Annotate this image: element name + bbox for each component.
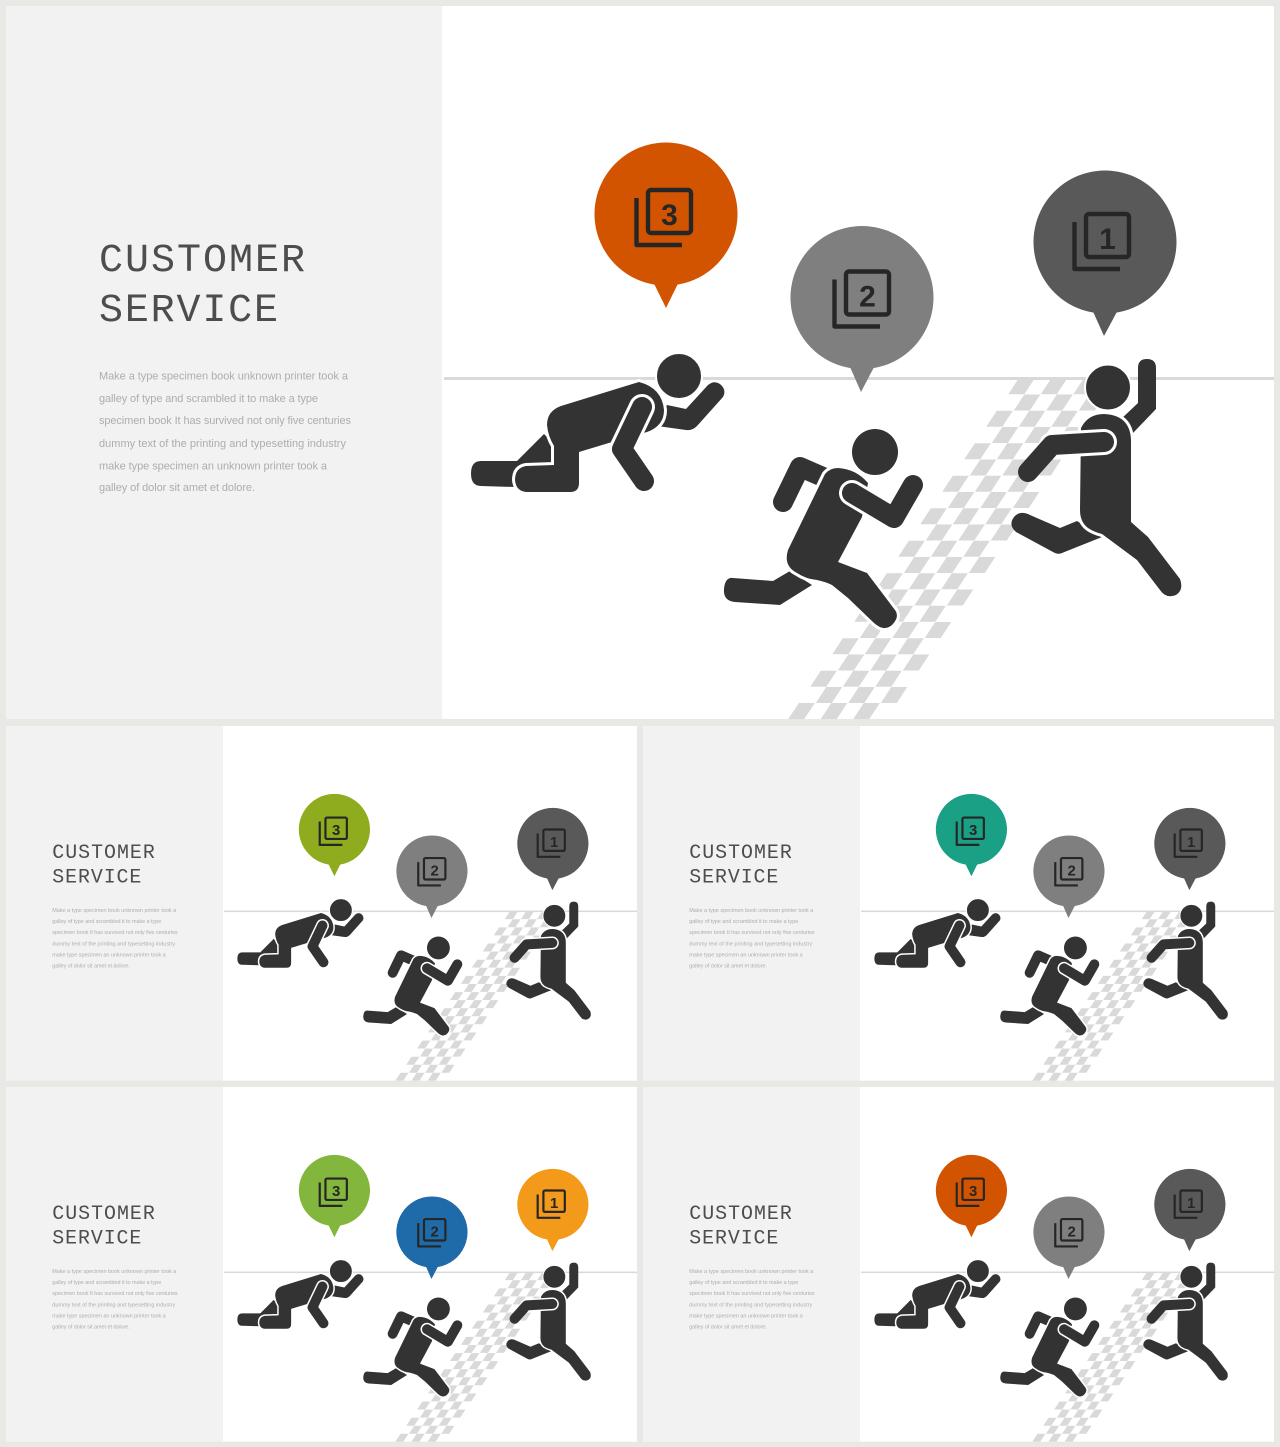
marker: second place bbox=[396, 1196, 468, 1279]
marker: second place: 2 bbox=[1068, 1224, 1076, 1240]
body text: galley of dolor sit amet et dolore. bbox=[52, 1324, 130, 1330]
panel: race scene bbox=[223, 1087, 637, 1442]
panel: text sidebar bbox=[643, 1087, 860, 1442]
finish line bbox=[444, 377, 1274, 380]
body text: galley of type and scrambled it to make a type bbox=[689, 1280, 798, 1286]
body text: make type specimen an unknown printer took a bbox=[99, 460, 328, 472]
body text: dummy text of the printing and typesetting industry bbox=[99, 438, 346, 450]
marker: third place: 3 bbox=[332, 822, 340, 839]
title: SERVICE bbox=[52, 866, 141, 889]
marker: third place bbox=[936, 1155, 1007, 1237]
marker: second place: 2 bbox=[431, 863, 439, 879]
body text bbox=[52, 908, 178, 969]
body text: dummy text of the printing and typesetting industry bbox=[689, 1302, 812, 1308]
title: CUSTOMER bbox=[52, 1202, 155, 1225]
icon: person crossing line bbox=[1143, 1263, 1228, 1381]
panel: text sidebar bbox=[6, 1087, 223, 1442]
marker: second place: 2 bbox=[859, 280, 876, 314]
body text: specimen book It has survived not only five centuries bbox=[52, 1291, 178, 1297]
marker: first place: 1 bbox=[1187, 1195, 1195, 1212]
marker: second place bbox=[1033, 1196, 1105, 1279]
body text: specimen book It has survived not only five centuries bbox=[52, 930, 178, 936]
body text: galley of type and scrambled it to make a type bbox=[99, 393, 318, 405]
title: CUSTOMER bbox=[689, 1202, 792, 1225]
marker: second place bbox=[1033, 835, 1105, 918]
body text bbox=[689, 1269, 815, 1330]
marker: second place bbox=[790, 226, 934, 392]
title: SERVICE bbox=[52, 1227, 141, 1250]
panel: race scene bbox=[860, 1087, 1274, 1442]
marker: third place: 3 bbox=[332, 1183, 340, 1200]
body text: make type specimen an unknown printer took a bbox=[52, 1314, 167, 1320]
icon: crawling person bbox=[237, 1260, 364, 1329]
body text: galley of type and scrambled it to make a type bbox=[52, 1280, 161, 1286]
marker: second place: 2 bbox=[1068, 863, 1076, 879]
marker: first place bbox=[1154, 808, 1225, 890]
icon: running person bbox=[1000, 936, 1094, 1035]
body text: dummy text of the printing and typesetting industry bbox=[689, 941, 812, 947]
marker: third place bbox=[936, 794, 1007, 876]
icon: crawling person bbox=[471, 353, 724, 492]
marker: first place bbox=[1154, 1169, 1225, 1251]
slide: multicolour variant bbox=[6, 1087, 637, 1442]
marker: first place: 1 bbox=[1187, 834, 1195, 851]
icon: running person bbox=[1000, 1297, 1094, 1396]
finish line bbox=[861, 1272, 1274, 1273]
icon: running person bbox=[724, 429, 913, 628]
body text: galley of type and scrambled it to make a type bbox=[689, 919, 798, 925]
title bbox=[689, 1202, 792, 1250]
body text: make type specimen an unknown printer took a bbox=[52, 953, 167, 959]
body text bbox=[99, 370, 352, 494]
panel: text sidebar bbox=[6, 726, 223, 1081]
checkered track bbox=[1032, 911, 1190, 1081]
title: CUSTOMER bbox=[689, 841, 792, 864]
body text: dummy text of the printing and typesetting industry bbox=[52, 941, 175, 947]
title bbox=[52, 841, 155, 889]
body text: make type specimen an unknown printer took a bbox=[689, 953, 804, 959]
panel: race scene bbox=[860, 726, 1274, 1081]
body text: galley of dolor sit amet et dolore. bbox=[689, 1324, 767, 1330]
slide: main bbox=[6, 6, 1274, 719]
body text: specimen book It has survived not only five centuries bbox=[689, 930, 815, 936]
marker: third place bbox=[594, 143, 738, 308]
marker: first place: 1 bbox=[550, 834, 558, 851]
marker: first place bbox=[1034, 171, 1176, 336]
icon: running person bbox=[363, 1297, 457, 1396]
title: SERVICE bbox=[689, 866, 778, 889]
marker: first place bbox=[517, 1169, 588, 1251]
body text bbox=[52, 1269, 178, 1330]
icon: person crossing line bbox=[1011, 359, 1181, 596]
checkered track bbox=[395, 1272, 553, 1442]
body text: specimen book It has survived not only five centuries bbox=[99, 415, 352, 427]
title bbox=[99, 239, 305, 334]
title bbox=[689, 841, 792, 889]
marker: third place bbox=[299, 1155, 370, 1237]
title: CUSTOMER bbox=[52, 841, 155, 864]
body text: galley of dolor sit amet et dolore. bbox=[689, 963, 767, 969]
body text: Make a type specimen book unknown printer took a bbox=[52, 1269, 177, 1275]
marker: first place: 1 bbox=[550, 1195, 558, 1212]
marker: third place: 3 bbox=[969, 822, 977, 839]
title: SERVICE bbox=[689, 1227, 778, 1250]
marker: second place: 2 bbox=[431, 1224, 439, 1240]
icon: person crossing line bbox=[1143, 902, 1228, 1020]
checkered track bbox=[1032, 1272, 1190, 1442]
body text: galley of dolor sit amet et dolore. bbox=[99, 482, 255, 494]
icon: person crossing line bbox=[506, 902, 591, 1020]
marker: third place: 3 bbox=[969, 1183, 977, 1200]
finish line bbox=[861, 911, 1274, 912]
body text: Make a type specimen book unknown printer took a bbox=[99, 370, 349, 382]
marker: second place bbox=[396, 835, 468, 918]
body text: galley of type and scrambled it to make a type bbox=[52, 919, 161, 925]
body text: Make a type specimen book unknown printer took a bbox=[689, 1269, 814, 1275]
marker: third place: 3 bbox=[661, 199, 678, 232]
marker: first place: 1 bbox=[1099, 223, 1116, 256]
marker: first place bbox=[517, 808, 588, 890]
body text: Make a type specimen book unknown printer took a bbox=[52, 908, 177, 914]
panel: race scene bbox=[223, 726, 637, 1081]
icon: crawling person bbox=[237, 899, 364, 968]
panel: text sidebar bbox=[6, 6, 442, 719]
icon: running person bbox=[363, 936, 457, 1035]
slide: green variant bbox=[6, 726, 637, 1081]
panel: text sidebar bbox=[643, 726, 860, 1081]
icon: person crossing line bbox=[506, 1263, 591, 1381]
title: SERVICE bbox=[99, 289, 278, 334]
slide: teal variant bbox=[643, 726, 1274, 1081]
body text: Make a type specimen book unknown printer took a bbox=[689, 908, 814, 914]
body text: specimen book It has survived not only five centuries bbox=[689, 1291, 815, 1297]
finish line bbox=[224, 1272, 637, 1273]
checkered track bbox=[395, 911, 553, 1081]
panel: race scene bbox=[442, 6, 1274, 719]
checkered track bbox=[788, 378, 1105, 719]
marker: third place bbox=[299, 794, 370, 876]
slide: orange variant bbox=[643, 1087, 1274, 1442]
body text bbox=[689, 908, 815, 969]
body text: dummy text of the printing and typesetting industry bbox=[52, 1302, 175, 1308]
title bbox=[52, 1202, 155, 1250]
body text: make type specimen an unknown printer took a bbox=[689, 1314, 804, 1320]
icon: crawling person bbox=[874, 899, 1001, 968]
icon: crawling person bbox=[874, 1260, 1001, 1329]
body text: galley of dolor sit amet et dolore. bbox=[52, 963, 130, 969]
finish line bbox=[224, 911, 637, 912]
title: CUSTOMER bbox=[99, 239, 305, 284]
